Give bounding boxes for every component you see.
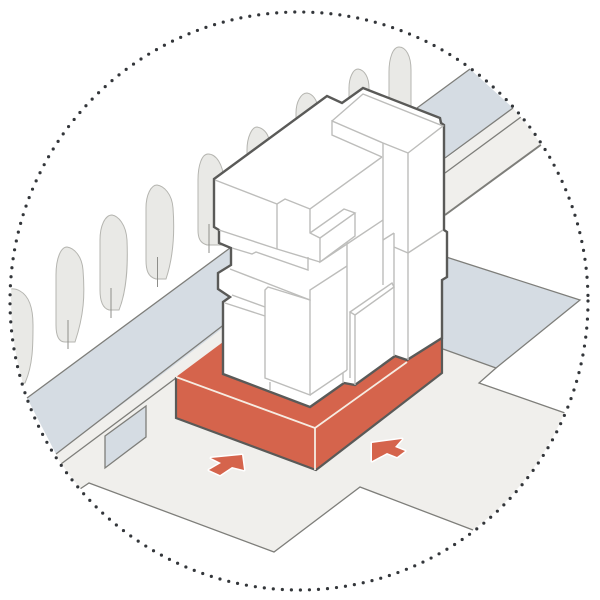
- blue window panel: [105, 406, 146, 468]
- tower inner edges: [215, 94, 443, 395]
- tree 2: [56, 247, 84, 349]
- blue water right: [443, 256, 580, 368]
- arrow right: [372, 439, 405, 461]
- blue canal: [27, 69, 513, 454]
- ground plane: [62, 350, 565, 553]
- row of trees: [5, 47, 411, 385]
- tree 3: [100, 215, 127, 318]
- tower building: [214, 88, 447, 407]
- tree 9: [389, 47, 411, 115]
- tower silhouette: [214, 88, 447, 407]
- tree 6: [246, 126, 269, 154]
- tree 1: [11, 288, 34, 384]
- tree 7: [296, 92, 317, 118]
- tree 8: [348, 68, 370, 97]
- arrow left: [209, 455, 244, 475]
- tree 4: [146, 185, 174, 287]
- road strip: [56, 108, 560, 464]
- tree 5: [198, 154, 224, 253]
- red podium: [176, 338, 442, 470]
